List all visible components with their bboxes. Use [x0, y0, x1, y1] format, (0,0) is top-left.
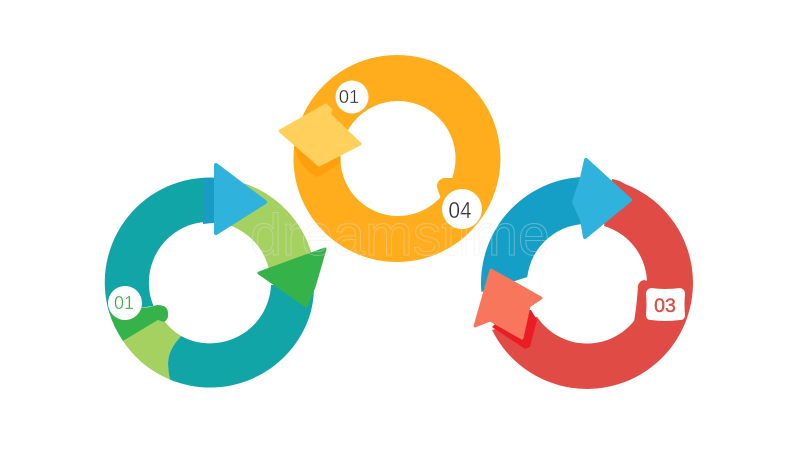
teal lower arc	[168, 285, 314, 388]
green arrow head	[259, 249, 325, 306]
orange ring body	[293, 55, 500, 262]
badge 01	[336, 80, 368, 114]
dark green tab	[109, 305, 168, 341]
badge 01 green: 01	[114, 293, 134, 313]
badge 04: 04	[448, 197, 472, 223]
badge 03	[646, 288, 685, 321]
red arc	[492, 179, 693, 389]
badge 04	[442, 189, 482, 229]
teal upper-left arc	[105, 178, 216, 312]
blue arrow head	[574, 160, 630, 237]
coral arrow head	[475, 270, 541, 338]
diamond arrow head	[280, 105, 360, 165]
light green top arc	[225, 182, 312, 275]
badge 01: 01	[339, 86, 359, 107]
light green lower segment	[123, 320, 181, 380]
watermark: dreamstime	[250, 203, 550, 268]
blue arrow head	[216, 165, 265, 233]
badge 01 green	[108, 286, 142, 320]
bright red shadow	[492, 310, 537, 349]
badge 03: 03	[654, 295, 676, 317]
inner bump at 04	[437, 178, 458, 205]
panel: teal and green ring	[105, 165, 325, 388]
dark blue band	[203, 178, 217, 224]
red inner tab	[634, 280, 652, 322]
diamond shadow	[294, 135, 340, 177]
panel: blue and red ring	[475, 160, 693, 389]
blue arc	[481, 177, 590, 292]
panel: orange ring	[280, 55, 500, 262]
